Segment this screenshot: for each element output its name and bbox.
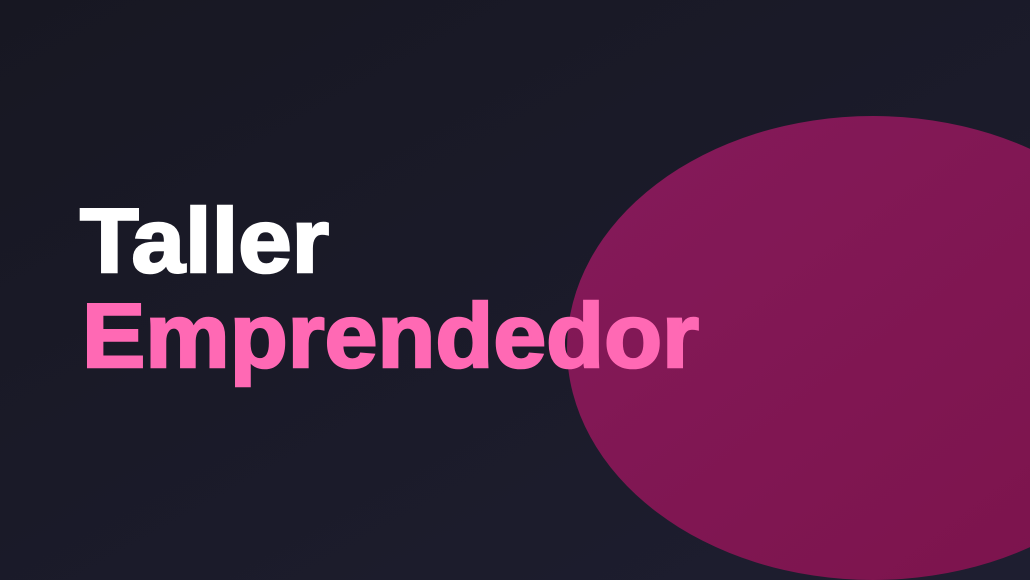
title line: Emprendedor: Emprendedor — [82, 286, 699, 387]
decorative magenta ellipse — [567, 116, 1030, 580]
title line: Taller: Taller — [80, 191, 329, 292]
title — [80, 191, 699, 387]
